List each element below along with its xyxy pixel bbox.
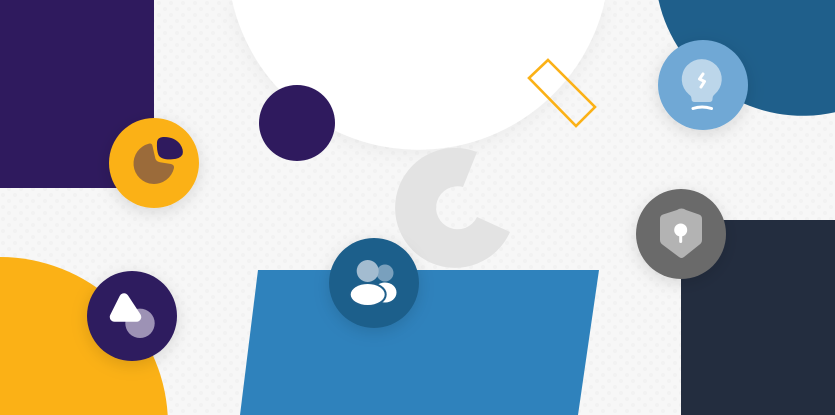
front head (357, 260, 379, 282)
large yellow circle (0, 257, 168, 415)
icon: triangle and circle (87, 271, 177, 361)
back body (374, 282, 396, 302)
lightning bolt (700, 74, 704, 87)
back head (376, 264, 394, 282)
yellow outlined rectangle (529, 60, 595, 126)
blue parallelogram (240, 270, 599, 415)
shield (660, 208, 702, 258)
icon: people (329, 238, 419, 328)
pie slice (157, 137, 183, 159)
icon: security shield (636, 189, 726, 279)
icon: light bulb (658, 40, 748, 130)
white triangle (114, 298, 136, 317)
dark navy rectangle (681, 220, 835, 415)
large white circle (232, 0, 605, 150)
front body (351, 284, 385, 305)
grey C shape (395, 148, 510, 268)
keyhole (674, 224, 687, 243)
teal quarter circle (658, 0, 835, 116)
bulb glass (682, 59, 722, 102)
translucent circle (125, 309, 155, 338)
icon: pie chart (109, 118, 199, 208)
bulb base (693, 107, 712, 108)
pie body (134, 144, 174, 184)
purple circle (259, 85, 335, 161)
purple square (0, 0, 154, 188)
